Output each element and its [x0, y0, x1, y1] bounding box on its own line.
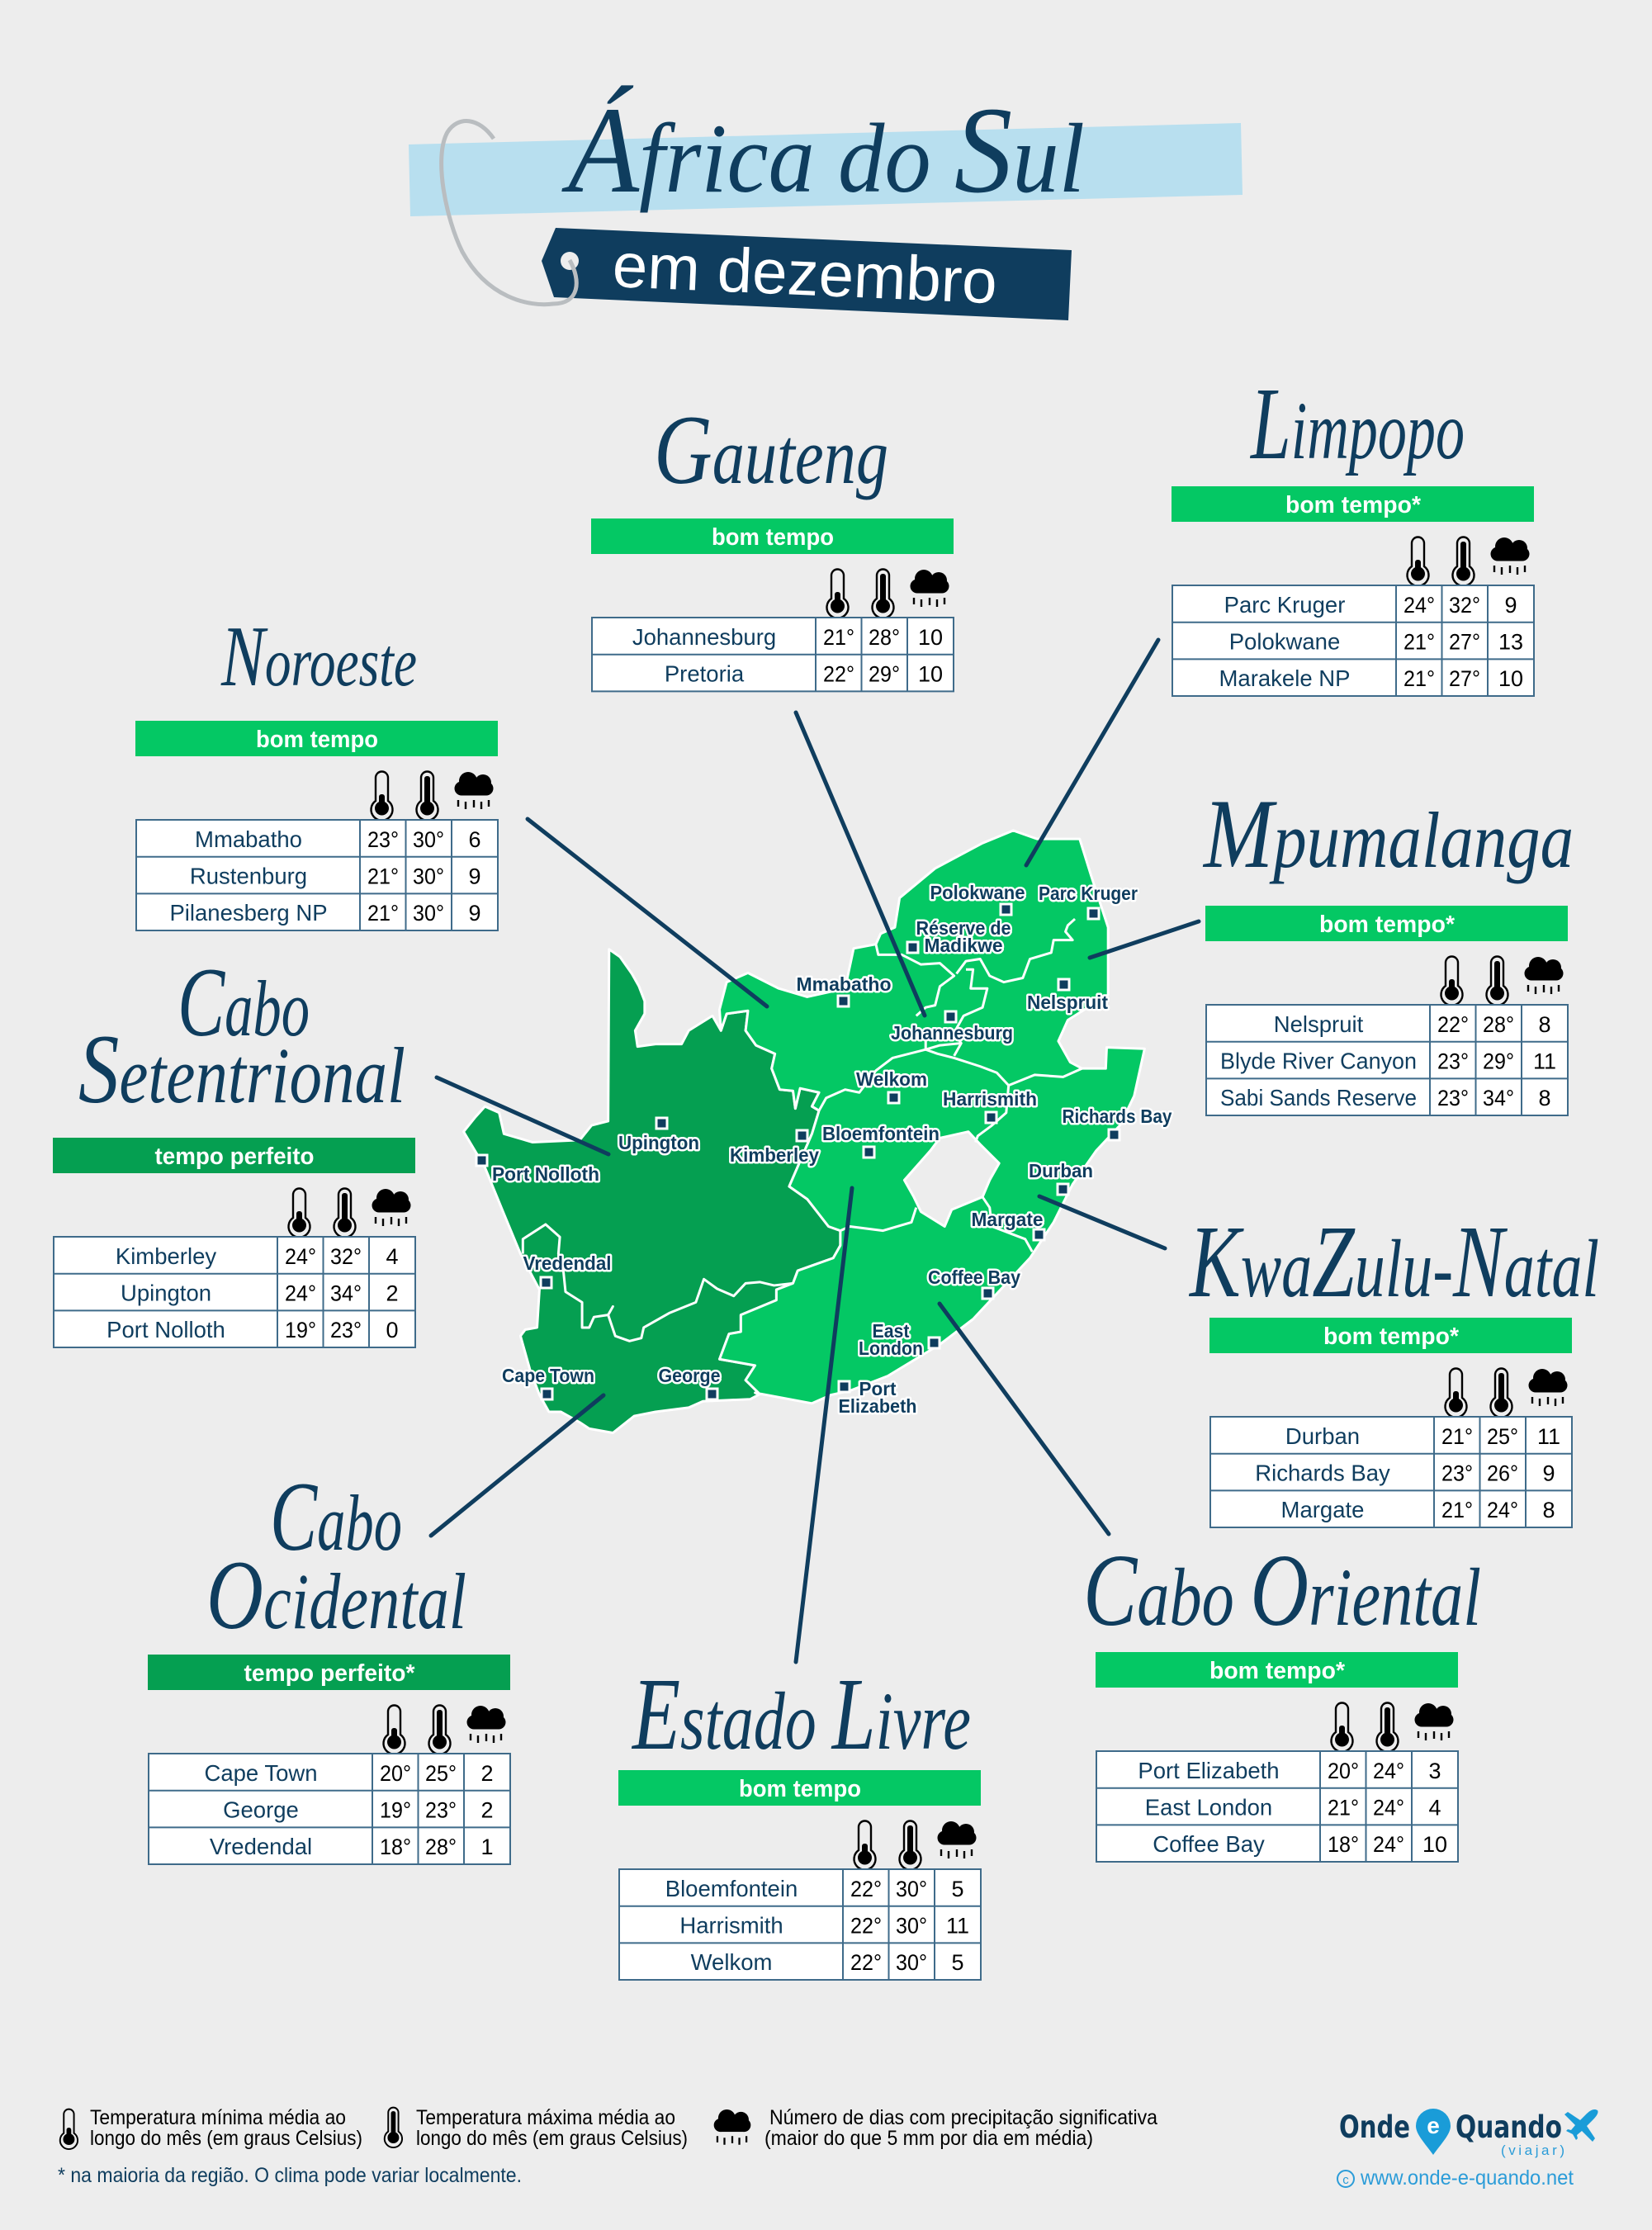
table: 30° — [413, 864, 444, 888]
table: Richards Bay — [1255, 1460, 1390, 1486]
table: 22° — [850, 1914, 882, 1939]
status band: bom tempo — [256, 727, 378, 753]
status band — [1209, 1318, 1572, 1353]
table: 28° — [425, 1835, 457, 1859]
western regions — [464, 831, 1144, 1433]
title band — [409, 123, 1243, 216]
table: 10 — [918, 625, 943, 650]
table: East London — [1145, 1795, 1272, 1820]
table: 8 — [1538, 1012, 1551, 1037]
table: Upington — [121, 1280, 211, 1306]
table: 30° — [413, 827, 444, 852]
city markers — [476, 904, 1119, 1399]
status band: tempo perfeito* — [244, 1660, 415, 1687]
table: 20° — [1328, 1759, 1359, 1783]
panel: Gauteng — [591, 518, 954, 691]
heading: Mpumalanga: Mpumalanga — [1202, 779, 1574, 888]
icons — [383, 1706, 505, 1754]
table: Pretoria — [665, 660, 745, 687]
table: Vredendal — [210, 1834, 312, 1859]
table: 30° — [896, 1914, 927, 1939]
table: 11 — [1537, 1424, 1560, 1449]
table: George — [223, 1797, 299, 1823]
legend text: minimum temperature: Temperatura mínima média ao — [90, 2106, 346, 2129]
table — [619, 1869, 981, 1980]
table: 11 — [1533, 1049, 1556, 1073]
table — [136, 820, 498, 930]
table: 21° — [1441, 1424, 1473, 1449]
legend text: minimum temperature — [90, 2106, 362, 2150]
table: 11 — [946, 1914, 969, 1939]
Lesotho — [904, 1132, 999, 1227]
map labels — [492, 882, 1172, 1417]
table — [1210, 1417, 1572, 1527]
table: Welkom — [691, 1949, 772, 1975]
table: 5 — [951, 1950, 964, 1975]
logo word: Quando: Quando — [1456, 2109, 1562, 2145]
logo tagline: (viajar) — [1501, 2142, 1564, 2158]
table — [54, 1237, 415, 1347]
map labels: Durban — [1029, 1160, 1093, 1181]
table: Coffee Bay — [1153, 1831, 1265, 1857]
heading: Cabo Setentrional: Setentrional — [78, 1014, 405, 1124]
panel: Noroeste — [135, 721, 498, 930]
table: 34° — [330, 1281, 362, 1306]
table: Bloemfontein — [665, 1876, 798, 1901]
map labels: Polokwane — [930, 882, 1025, 903]
heading: Cabo Setentrional — [78, 947, 405, 1124]
icon: copyright — [1337, 2171, 1354, 2187]
map labels: Richards Bay — [1062, 1106, 1172, 1127]
table: Mmabatho — [195, 826, 302, 852]
table: 10 — [1422, 1832, 1447, 1857]
table: 9 — [1504, 593, 1517, 618]
map labels: Mmabatho — [796, 973, 892, 995]
table: 22° — [1437, 1012, 1469, 1037]
table: 28° — [1483, 1012, 1514, 1037]
table: 21° — [367, 901, 399, 926]
heading: KwaZulu-Natal: KwaZulu-Natal — [1189, 1205, 1599, 1319]
tag — [542, 228, 1072, 320]
icon: plane — [1564, 2109, 1598, 2142]
table: Durban — [1285, 1423, 1360, 1449]
heading: Limpopo: Limpopo — [1250, 367, 1465, 481]
heading: Cabo Setentrional: Cabo — [178, 947, 310, 1057]
table: 22° — [850, 1877, 882, 1901]
icon: rain cloud — [714, 2109, 750, 2145]
table: Sabi Sands Reserve — [1220, 1085, 1417, 1110]
legend text: maximum temperature — [416, 2106, 688, 2150]
status band — [591, 518, 954, 554]
table — [1096, 1751, 1458, 1862]
status band — [618, 1770, 981, 1806]
status band — [53, 1138, 415, 1173]
icon: copyright: c — [1342, 2173, 1349, 2187]
panel: Cabo Setentrional — [53, 1138, 415, 1347]
table: 8 — [1538, 1086, 1551, 1110]
map labels: George — [659, 1365, 720, 1386]
map of South Africa — [464, 831, 1144, 1433]
icons — [827, 570, 949, 618]
heading: Cabo Ocidental: Ocidental — [206, 1540, 466, 1650]
table — [592, 618, 954, 691]
map labels: Réserve de — [916, 917, 1011, 939]
table: Pilanesberg NP — [169, 900, 328, 926]
table: 9 — [1542, 1461, 1555, 1486]
table: Rustenburg — [190, 864, 307, 888]
title block — [409, 82, 1243, 320]
status band: bom tempo* — [1323, 1323, 1460, 1350]
tag hole — [561, 252, 579, 270]
table: 6 — [468, 827, 481, 852]
table: 24° — [1373, 1832, 1404, 1857]
table: 24° — [1373, 1759, 1404, 1783]
table: 20° — [380, 1761, 411, 1786]
icons — [372, 771, 494, 821]
table: Johannesburg — [632, 624, 776, 650]
map labels: East — [872, 1320, 910, 1342]
table: 25° — [425, 1761, 457, 1786]
table: 22° — [850, 1950, 882, 1975]
table: Harrismith — [679, 1912, 783, 1939]
table: 30° — [896, 1877, 927, 1901]
table: 21° — [1403, 629, 1435, 654]
legend text: maximum temperature: Temperatura máxima média ao — [416, 2106, 675, 2129]
legend — [58, 2106, 1157, 2187]
table: 26° — [1487, 1461, 1518, 1486]
map labels: Bloemfontein — [822, 1123, 940, 1144]
table: 23° — [425, 1798, 457, 1823]
icons — [289, 1189, 411, 1238]
subtitle: em dezembro — [611, 230, 999, 317]
table: 30° — [896, 1950, 927, 1975]
heading: Gauteng: Gauteng — [654, 395, 888, 504]
heading: Cabo Oriental: Cabo Oriental — [1083, 1534, 1481, 1648]
table — [1172, 585, 1534, 696]
table: 32° — [1449, 593, 1480, 618]
table: 1 — [480, 1835, 494, 1859]
map labels: Margate — [971, 1209, 1044, 1230]
table: Margate — [1281, 1497, 1364, 1522]
table: Port Nolloth — [107, 1317, 225, 1342]
table: 8 — [1542, 1498, 1555, 1522]
table: 23° — [1437, 1049, 1469, 1073]
table: 13 — [1498, 629, 1523, 654]
table: Marakele NP — [1219, 665, 1350, 691]
table: Parc Kruger — [1224, 592, 1345, 618]
map labels: Parc Kruger — [1039, 883, 1138, 904]
eastern regions — [720, 831, 1144, 1404]
icon: maximum temperature — [385, 2108, 402, 2147]
map labels: Upington — [618, 1132, 699, 1153]
status band: tempo perfeito — [155, 1143, 314, 1170]
legend text: rainy days: Número de dias com precipitação significativa — [769, 2106, 1157, 2129]
table: 2 — [480, 1761, 494, 1786]
title text: África do Sul — [561, 82, 1085, 219]
table: 24° — [285, 1244, 316, 1269]
legend text: rainy days: (maior do que 5 mm por dia em média) — [764, 2127, 1093, 2150]
table: 29° — [869, 662, 900, 687]
map labels: Welkom — [856, 1068, 927, 1090]
icons — [1331, 1702, 1453, 1752]
map labels: Cape Town — [502, 1365, 594, 1386]
legend text: minimum temperature: longo do mês (em graus Celsius) — [90, 2127, 362, 2150]
panel: Estado Livre — [618, 1770, 981, 1980]
table: 27° — [1449, 666, 1480, 691]
logo word: Onde: Onde — [1339, 2109, 1410, 2145]
table: 10 — [1498, 666, 1523, 691]
table: Nelspruit — [1274, 1011, 1364, 1037]
table: 29° — [1483, 1049, 1514, 1073]
map labels: Vredendal — [523, 1252, 611, 1274]
table: 19° — [285, 1318, 316, 1342]
legend text: maximum temperature: longo do mês (em graus Celsius) — [416, 2127, 688, 2150]
table: 21° — [823, 625, 854, 650]
table — [1206, 1005, 1568, 1115]
table: 25° — [1487, 1424, 1518, 1449]
table: 23° — [367, 827, 399, 852]
status band: bom tempo — [739, 1776, 861, 1802]
table: 34° — [1483, 1086, 1514, 1110]
status band — [148, 1655, 510, 1690]
map labels: Coffee Bay — [928, 1267, 1020, 1288]
table: 23° — [1441, 1461, 1473, 1486]
table: 23° — [330, 1318, 362, 1342]
table: 21° — [1403, 666, 1435, 691]
table: 23° — [1437, 1086, 1469, 1110]
table: 5 — [951, 1877, 964, 1901]
table: 21° — [1328, 1795, 1359, 1820]
footnote: * na maioria da região. O clima pode variar localmente. — [58, 2164, 522, 2187]
panel: Limpopo — [1172, 486, 1534, 696]
map labels: Harrismith — [943, 1088, 1037, 1110]
panel: Mpumalanga — [1205, 906, 1568, 1115]
status band — [1205, 906, 1568, 941]
table: 10 — [918, 662, 943, 687]
website: www.onde-e-quando.net — [1360, 2166, 1574, 2190]
table: 24° — [1373, 1795, 1404, 1820]
status band: bom tempo* — [1209, 1658, 1346, 1684]
table: 19° — [380, 1798, 411, 1823]
map labels: Johannesburg — [891, 1022, 1013, 1044]
table: 28° — [869, 625, 900, 650]
table: 21° — [367, 864, 399, 888]
map labels: Port Nolloth — [492, 1163, 599, 1185]
status band — [1172, 486, 1534, 522]
panel: Cabo Ocidental — [148, 1655, 510, 1864]
map labels: Port — [859, 1378, 897, 1399]
table: 27° — [1449, 629, 1480, 654]
panel: KwaZulu-Natal — [1209, 1318, 1572, 1527]
icons — [1407, 537, 1529, 586]
panel: Cabo Oriental — [1096, 1652, 1458, 1862]
table: 4 — [386, 1244, 399, 1269]
table: 22° — [823, 662, 854, 687]
icon: location pin — [1416, 2109, 1451, 2155]
logo — [1337, 2109, 1598, 2190]
icon: minimum temperature — [60, 2109, 78, 2149]
status band: bom tempo — [712, 524, 834, 551]
region borders — [523, 919, 1082, 1341]
table: 3 — [1428, 1759, 1441, 1783]
icons — [1445, 1369, 1567, 1418]
status band: bom tempo* — [1285, 492, 1422, 518]
map labels: Madikwe — [925, 935, 1002, 956]
table: 32° — [330, 1244, 362, 1269]
table: 9 — [468, 901, 481, 926]
status band: bom tempo* — [1319, 911, 1456, 938]
table: Kimberley — [116, 1243, 216, 1269]
icons — [1441, 956, 1564, 1006]
table — [149, 1754, 510, 1864]
status band — [1096, 1652, 1458, 1688]
heading: Noroeste: Noroeste — [220, 608, 417, 704]
table: 24° — [1487, 1498, 1518, 1522]
table: Port Elizabeth — [1138, 1758, 1280, 1783]
map labels: Elizabeth — [839, 1395, 916, 1417]
status band — [135, 721, 498, 756]
heading: Cabo Ocidental: Cabo — [270, 1461, 402, 1571]
table: Polokwane — [1229, 629, 1340, 654]
table: 0 — [386, 1318, 399, 1342]
heading: Estado Livre: Estado Livre — [631, 1658, 971, 1772]
tag string — [442, 121, 576, 305]
connector lines — [431, 640, 1199, 1662]
table: 2 — [480, 1798, 494, 1823]
map labels: Nelspruit — [1027, 992, 1108, 1013]
legend text: rainy days — [764, 2106, 1157, 2150]
map labels: Kimberley — [730, 1144, 819, 1166]
table: 9 — [468, 864, 481, 888]
table: 21° — [1441, 1498, 1473, 1522]
table: 24° — [1403, 593, 1435, 618]
heading: Cabo Ocidental — [206, 1461, 466, 1650]
table: Cape Town — [204, 1760, 318, 1786]
icons — [854, 1821, 976, 1870]
table: 30° — [413, 901, 444, 926]
table: 24° — [285, 1281, 316, 1306]
table: 18° — [1328, 1832, 1359, 1857]
icon: location pin: e — [1427, 2113, 1440, 2138]
table: 2 — [386, 1281, 399, 1306]
table: 4 — [1428, 1795, 1441, 1820]
table: Blyde River Canyon — [1220, 1049, 1417, 1073]
table: 18° — [380, 1835, 411, 1859]
map labels: London — [859, 1338, 923, 1359]
